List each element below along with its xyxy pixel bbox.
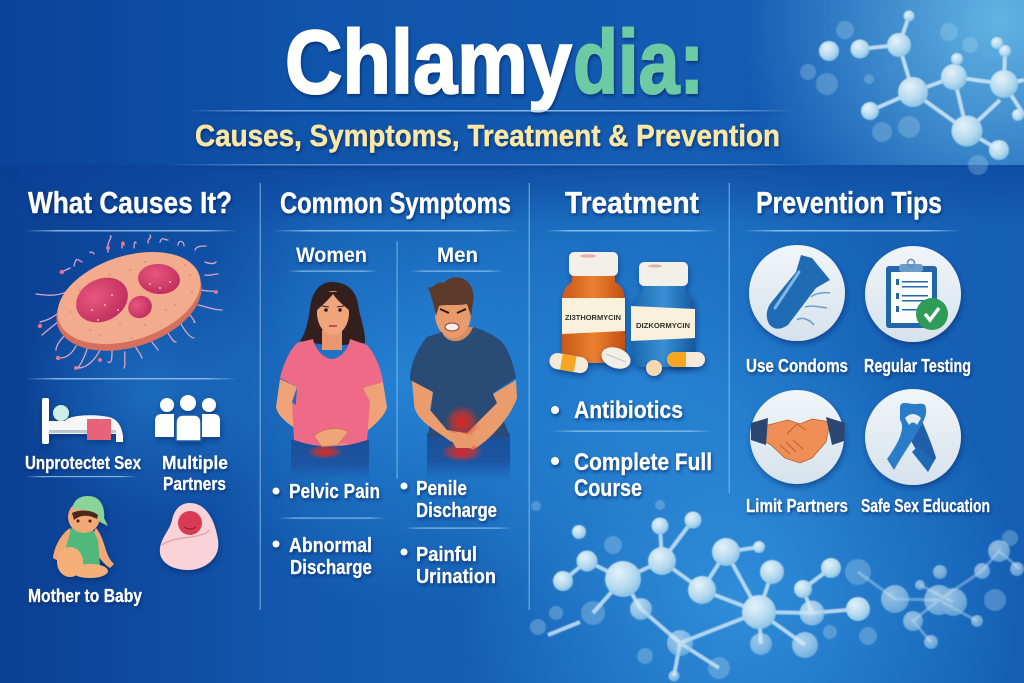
icon: clipboard with check [865, 246, 961, 342]
symptom list: women [272, 481, 386, 579]
label: safe sex education: Safe Sex Education [861, 496, 990, 516]
symptom list: men: Discharge [416, 500, 497, 522]
list: treatment items: Course [574, 475, 642, 502]
icon: bacterium [36, 235, 222, 370]
icon: blue pill bottle [631, 262, 695, 367]
heading: prevention tips: Prevention Tips [756, 185, 942, 220]
label: multiple partners: Multiple [162, 453, 228, 473]
subheading: men: Men [437, 244, 478, 267]
subtitle: Causes, Symptoms, Treatment & Prevention [195, 118, 780, 153]
label: multiple partners: Partners [163, 474, 226, 494]
icon: pills [548, 343, 705, 376]
icon: group of people [155, 395, 220, 441]
panel: treatment [545, 185, 717, 502]
label: limit partners: Limit Partners [746, 496, 848, 516]
molecule network: top right [800, 10, 1024, 175]
symptom list: women: Discharge [290, 557, 372, 579]
heading: common symptoms: Common Symptoms [280, 187, 511, 220]
symptom list: women: Pelvic Pain [289, 481, 380, 503]
list: treatment items [551, 397, 713, 502]
symptom list: men: Urination [416, 566, 496, 588]
figure: man [410, 277, 517, 480]
label: use condoms: Use Condoms [746, 356, 848, 376]
icon: orange pill bottle [562, 252, 625, 363]
icon: condom [749, 245, 845, 341]
icon: blue pill bottle: DIZKORMYCIN [636, 321, 690, 330]
list: treatment items: Antibiotics [574, 397, 683, 424]
symptom list: men: Painful [416, 544, 477, 566]
figure: woman [276, 282, 387, 480]
label: unprotectet sex: Unprotectet Sex [25, 453, 141, 473]
panel: common symptoms [272, 187, 519, 588]
icon: handshake [750, 390, 845, 484]
icon: orange pill bottle: ZI3THORMYCIN [565, 313, 621, 322]
icon: baby [53, 496, 114, 578]
panel: prevention tips [743, 185, 990, 516]
heading: what causes it: What Causes It? [28, 185, 232, 220]
symptom list: women: Abnormal [289, 535, 372, 557]
column dividers [260, 183, 730, 610]
symptom list: men: Penile [416, 478, 467, 500]
icon: bed [42, 398, 123, 444]
symptom list: men [400, 478, 512, 588]
icon: swaddled infant [160, 503, 218, 570]
label: regular testing: Regular Testing [864, 356, 971, 376]
title: dia: [573, 13, 704, 113]
list: treatment items: Complete Full [574, 449, 712, 476]
label: mother to baby: Mother to Baby [28, 586, 142, 606]
title: Chlamy [285, 13, 572, 113]
subheading: women: Women [296, 244, 367, 267]
label: multiple partners [162, 453, 228, 494]
molecule network: bottom [530, 500, 1024, 682]
icon: awareness ribbon [865, 389, 961, 485]
panel: what causes it [25, 185, 238, 606]
heading: treatment: Treatment [565, 185, 699, 220]
